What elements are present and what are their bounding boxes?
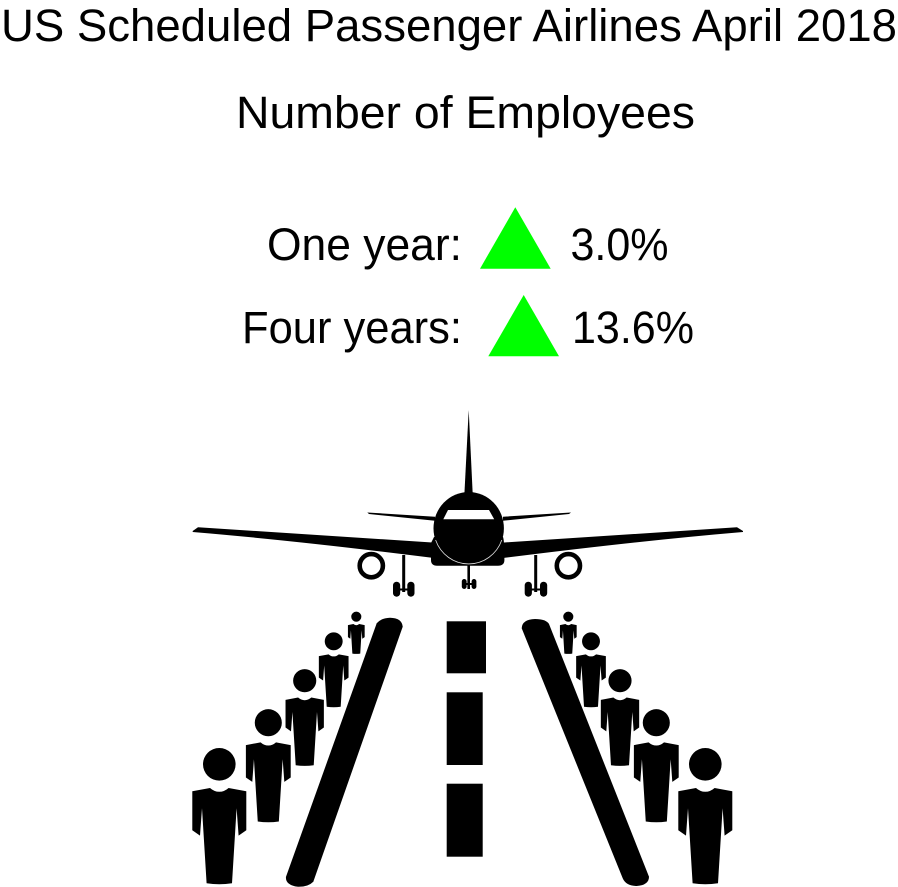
employees: left queue [192,612,365,884]
plane fuselage [434,492,504,565]
stats: four year change: 13.6% [572,302,694,353]
plane tail fin [464,410,473,494]
stats: one year change [267,207,668,270]
employees: right queue [560,612,732,884]
plane lower fuselage block [431,537,504,566]
plane wings [193,527,743,558]
runway centre dashes [447,621,486,857]
subtitle: Number of Employees [236,87,695,138]
stats: four year change [242,295,694,356]
title: US Scheduled Passenger Airlines April 2018 [1,0,897,51]
icon: airplane front view [193,410,743,597]
icon: green up triangle [488,295,559,356]
plane engines [360,554,580,577]
stats: one year change: 3.0% [570,219,668,270]
plane windshield [443,510,494,519]
plane landing gear [393,555,547,597]
stats: one year change: One year: [267,219,462,270]
stats: four year change: Four years: [242,302,462,353]
plane horizontal stabilizers [367,512,571,521]
runway left edge stripe [286,618,403,887]
runway right edge stripe [522,619,649,886]
icon: green up triangle [480,207,551,269]
